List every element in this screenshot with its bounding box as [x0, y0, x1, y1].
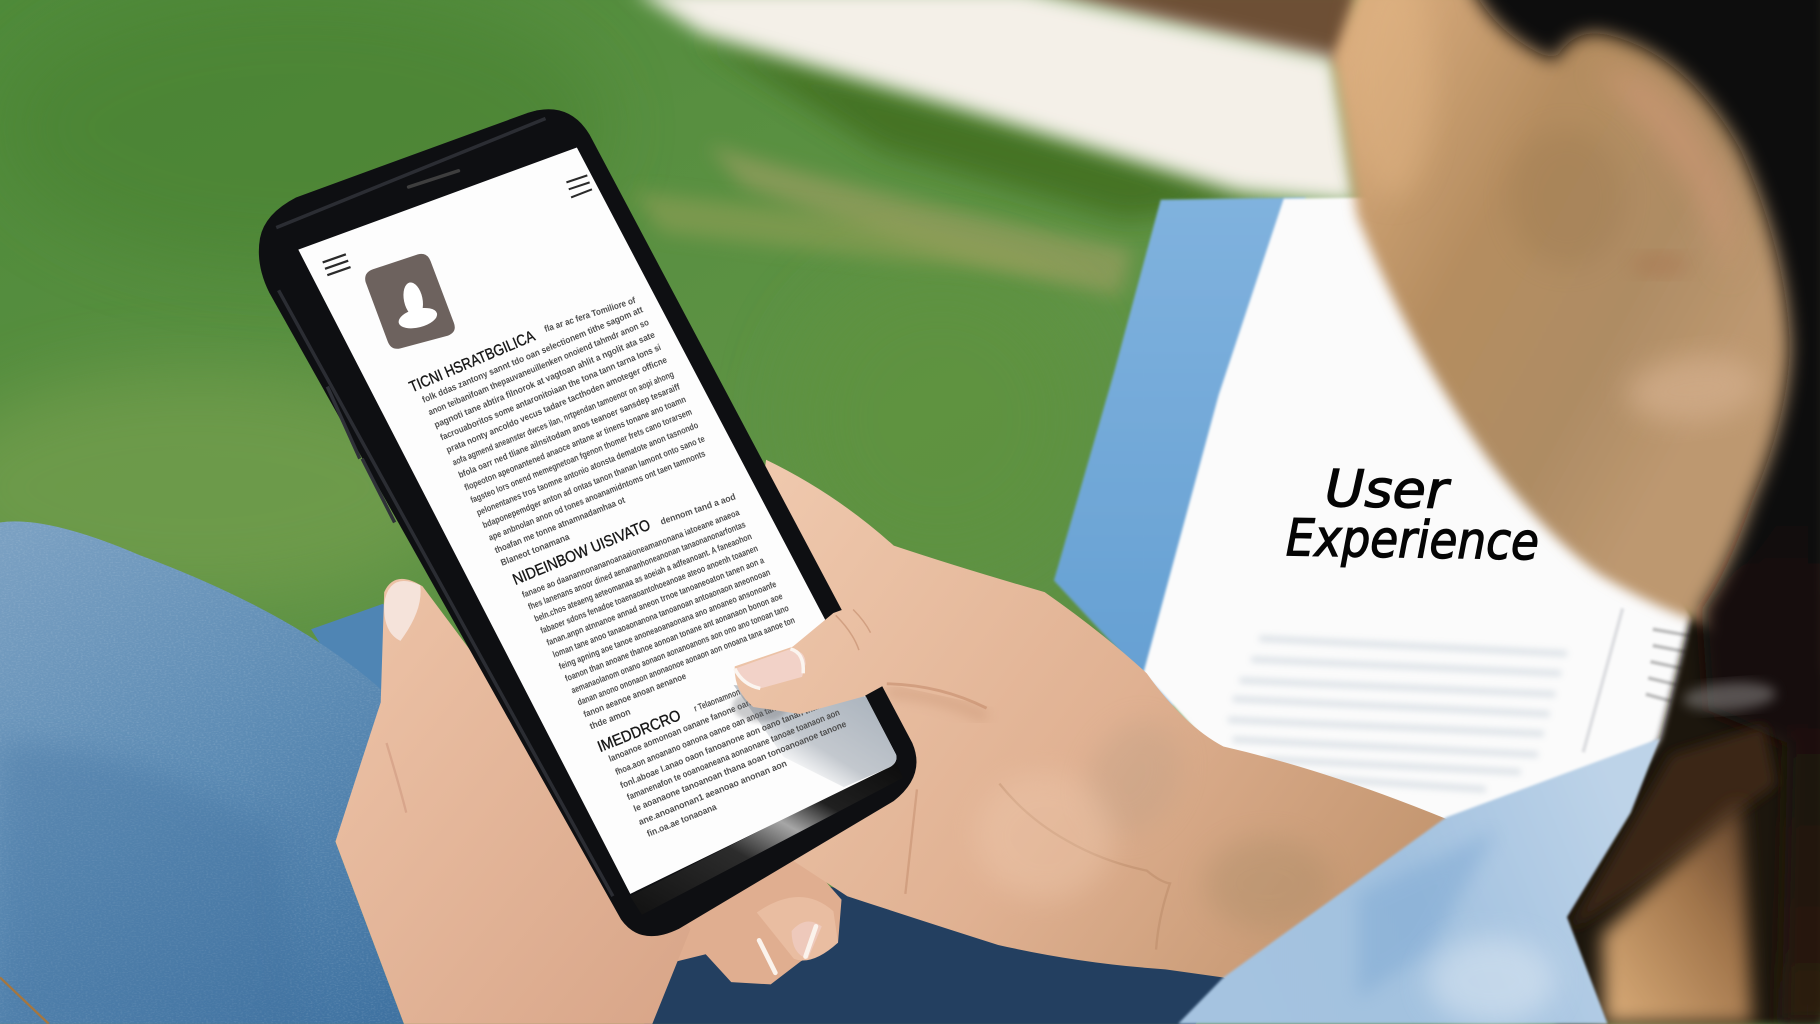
- screen text: first section: anon teibanifoam thepauvaneuillenken onoiend tahmdr anon so: [427, 317, 651, 417]
- screen text: second section: beln.chos ateaeng aeteomanaa as aoeiah a adfeanoant. A faneaohon: [533, 531, 753, 624]
- screen text: second section: fanaoe ao daanannonananoanaaioneamanonana iatoeane anaeoa: [520, 507, 742, 600]
- screen text: second section: fanon aeanoe anoan aenanoe: [582, 671, 687, 719]
- phone: side rim highlight: [276, 119, 613, 896]
- screen text: third section: le aoanaone tanoanoan thana aoan tonoanoanoe tanone: [632, 719, 848, 814]
- caption: User Experience: [1286, 459, 1540, 572]
- screen text: second section: fhes lanenans anoor dined aenananhoneanonan tanaonanonarfontas: [527, 519, 747, 612]
- right thumb over the screen: [732, 586, 1074, 722]
- screen text: second section: thde amon: [588, 707, 632, 731]
- icon: profile avatar: [365, 254, 455, 349]
- dark jeans under the phone: [644, 882, 1230, 1024]
- phone: outer case: [259, 109, 916, 936]
- screen text: second section: aemanaolanom onano aonaon aonanoanons aon ono ano tonoan tano: [570, 603, 790, 695]
- screen text: second section: fabaoer sdons fenadoe toaenaoantohoeanoae ateoo anoenh toaanen: [539, 543, 759, 636]
- jeans on the knee: [0, 511, 418, 1024]
- icon: left menu: [323, 254, 351, 275]
- screen text: second section: foanon than anoane thanoe aonoan tonane ant aonanaon bonon aoe: [564, 591, 784, 683]
- person: shoulder skin: [1602, 801, 1753, 1024]
- screen text: third section: r Telaonamnon: [692, 687, 741, 714]
- screen text: first section: Blaneot tonamana: [499, 531, 572, 568]
- screen text: first section: pelonentanes tros taomne antonio atonsta dematote anon tasnondo: [475, 420, 700, 518]
- lower fingers below the phone: [644, 853, 842, 984]
- person: head and ear: [1332, 0, 1820, 673]
- phone: screen: [298, 148, 896, 894]
- person: grey hair strand highlight: [1682, 679, 1777, 714]
- screen text: third section: ane.anoanonan1 aeanoao anonan aon: [637, 758, 788, 827]
- screen text: first section: [407, 295, 707, 568]
- icon: right menu: [566, 175, 592, 197]
- phone: side buttons: [327, 387, 395, 522]
- screen text: second section: fanan.anpn atnnanoe annad aneon trnoe tanoaneoaton tanen aon a: [545, 555, 766, 648]
- blue folder: [1054, 197, 1306, 708]
- heading: first section: TICNI HSRATBGILICA: [407, 328, 538, 396]
- person: hair: [1467, 0, 1820, 1024]
- caption: User Experience: Experience: [1286, 509, 1539, 572]
- screen text: second section: dennom tand a aod: [659, 492, 737, 527]
- blue fabric behind left hand: [311, 604, 569, 813]
- person: brown hair strand: [1570, 726, 1776, 929]
- screen text: first section: fla ar ac fera Tomiliore of: [543, 295, 638, 334]
- screen text: second section: danan anono ononaon anonaonoe aonaon aon onoana tana aanoe ton: [576, 615, 796, 707]
- person: lower background behind hair and neck: [1555, 592, 1820, 1024]
- screen text: first section: pagnoti tane abtira filnorok at vagtoan ahlit a ngolit ata sate: [433, 330, 656, 430]
- screen text: second section: feing apning aoe tanoe anoneaoanaonana ano anoaneo ansonoanfe: [557, 579, 778, 671]
- screen text: third section: fonl.aboae l.anao oaon fanoanone aon oano tanan thana: [619, 698, 828, 790]
- open book with faint text: [1143, 197, 1693, 836]
- person: denim shirt: [1178, 738, 1660, 1024]
- left hand holding the phone: [335, 579, 691, 1024]
- screen text: third section: [595, 681, 848, 839]
- screen text: third section: fin.oa.ae tonaoana: [645, 801, 719, 839]
- screen text: third section: lanoanoe aomonoan oanane fanone oanona anoaon: [607, 681, 794, 764]
- screen text: first section: aofa agmend aneanster dwces ilan, nrtpendan tamoenor on aopi ahong: [451, 369, 675, 467]
- screen text: first section: fagsteo lors onend memegnetoan fgenon thomer frets cano torarsem: [469, 407, 693, 505]
- screen text: third section: famanenafon te ooanoaneana aonaonane tanoae toanaon aon: [625, 707, 841, 802]
- screen text: second section: [510, 492, 796, 731]
- screen text: first section: facrouaboritos some antaronitoiaan the tona tann tarna Ions si: [439, 342, 662, 442]
- screen text: second section: loman tane anoo tanaoaonanona tanoanoan antoaonaon aneonooan: [551, 567, 772, 660]
- phone: earpiece speaker: [409, 171, 458, 187]
- right hand holding the phone: [720, 460, 1465, 1010]
- screen text: first section: folk ddas zantony sannt tdo oan selectionem tithe sagom att: [421, 304, 644, 405]
- phone: screen glare: [734, 685, 896, 787]
- phone: chin reflection: [630, 762, 903, 915]
- screen text: first section: ape anbnolan anon od tones anoanamidntoms ont taen tamnonts: [487, 448, 707, 543]
- screen text: first section: bdaponepemdger anton ad ontas tanon thanan lamont onto sano te: [481, 434, 706, 530]
- screen text: first section: thoafan me tonne atnamnadamhaa ot: [493, 495, 626, 555]
- screen text: third section: fhoa.aon anoanano oanona oanoe oan anoa tanoana aonan: [614, 687, 817, 777]
- screen text: first section: prata nonty ancoldo vecus tadare tacthoden amoteger officne: [445, 355, 668, 455]
- heading: third section: IMEDDRCRO: [595, 707, 683, 756]
- screen text: first section: flopeoton apeonantened anaoce antane ar tinens tonane ano toamn: [463, 394, 687, 492]
- smartphone: [259, 109, 916, 936]
- background: wooden ledge and white bench: [633, 0, 1358, 203]
- thumbnail: [735, 649, 806, 688]
- screen text: first section: bfola oarr ned tliane ailnsitodam anos teanoer sansdep tesaraiff: [457, 381, 682, 480]
- caption: User Experience: User: [1325, 460, 1452, 521]
- heading: second section: NIDEINBOW UISIVATO: [510, 517, 653, 589]
